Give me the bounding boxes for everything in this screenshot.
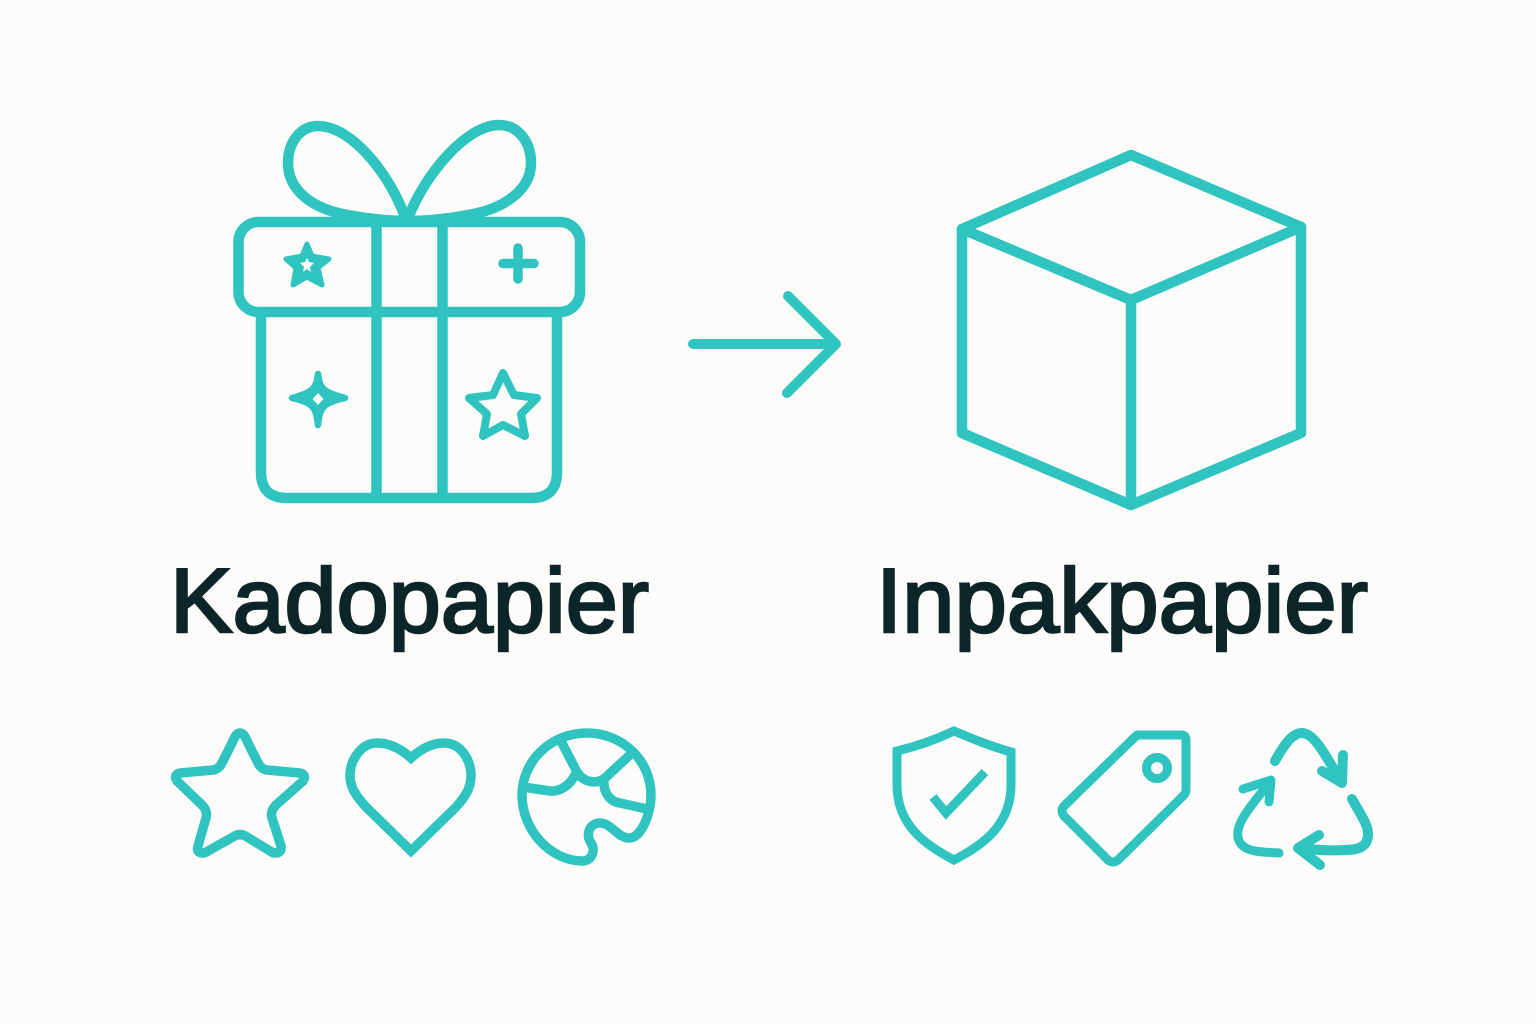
title: Kadopapier: Kadopapier (170, 551, 649, 652)
icon: cardboard box (962, 155, 1301, 505)
icon: shield with check (897, 731, 1011, 860)
title: Inpakpapier: Inpakpapier (876, 551, 1368, 652)
palette dividers (523, 743, 647, 809)
box inner edges (962, 227, 1301, 505)
icon: recycle arrows (1238, 733, 1368, 865)
icon: palette (522, 733, 651, 861)
shield outline (897, 731, 1011, 860)
arrow (693, 296, 836, 393)
small star on lid (286, 244, 329, 285)
icon: star (176, 733, 304, 853)
sparkle on body (292, 374, 345, 425)
gift body (261, 312, 557, 498)
gift ribbon (376, 222, 442, 498)
tag hole (1146, 758, 1168, 778)
box outline (962, 155, 1301, 505)
plus on lid (503, 248, 534, 279)
tag outline (1062, 735, 1186, 862)
star on body (469, 373, 537, 436)
icon: price tag (1062, 735, 1186, 862)
left arrow (1238, 780, 1279, 853)
gift lid (238, 222, 580, 312)
check mark (933, 772, 985, 813)
icon: heart (350, 743, 471, 851)
icon: gift box (238, 125, 580, 498)
palette outline (522, 733, 651, 861)
top arrow (1275, 733, 1343, 783)
gift bow (288, 125, 531, 221)
right arrow (1298, 799, 1368, 865)
